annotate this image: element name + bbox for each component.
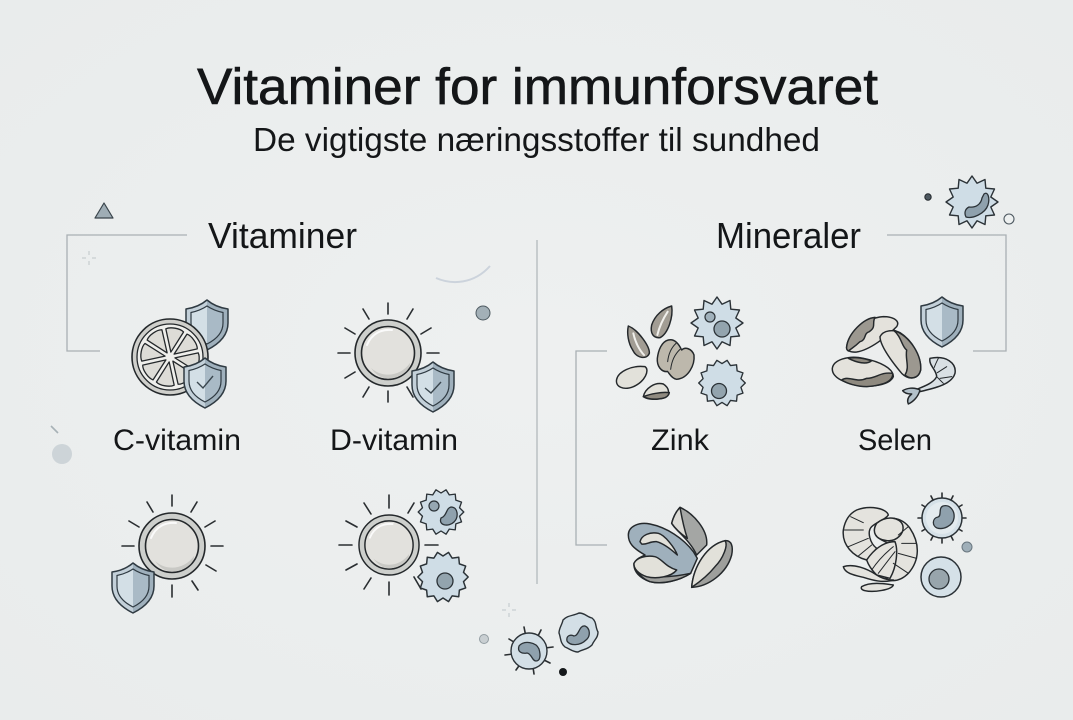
heading: Vitaminer: Vitaminer — [208, 215, 357, 256]
label: D-vitamin: D-vitamin — [330, 424, 458, 457]
icon: sun with shield — [112, 495, 223, 613]
icon: shrimp and immune cells — [843, 493, 972, 597]
center divider — [536, 240, 538, 584]
subtitle: De vigtigste næringsstoffer til sundhed — [253, 121, 820, 158]
label: Selen: Selen — [858, 424, 932, 457]
icon: sun with immune cells — [339, 490, 468, 602]
icon: decorative plus left — [82, 251, 96, 265]
icon: seeds and immune cells — [616, 297, 745, 406]
decorative arc — [436, 266, 490, 282]
connector: zinc bracket — [576, 351, 607, 545]
icon: lemon with shields — [132, 300, 228, 408]
decorative dot — [476, 306, 490, 320]
title: Vitaminer for immunforsvaret — [197, 58, 878, 115]
decorative dot left — [52, 444, 72, 464]
connector: minerals bracket — [887, 235, 1006, 351]
decorative stroke left — [51, 426, 58, 433]
icon: D-vitamin sun with shield — [338, 303, 454, 412]
connector: vitamins bracket — [67, 235, 187, 351]
icon: Brazil nuts, shield and shrimp — [832, 297, 963, 404]
icon: top-right immune cell cluster — [925, 176, 1014, 228]
label: C-vitamin: C-vitamin — [113, 424, 241, 457]
icon: bottom immune cell cluster — [480, 603, 598, 676]
label: Zink: Zink — [651, 424, 710, 457]
icon: mussels and almond — [628, 507, 732, 587]
heading: Mineraler: Mineraler — [716, 215, 861, 256]
icon: decorative triangle — [95, 203, 113, 218]
